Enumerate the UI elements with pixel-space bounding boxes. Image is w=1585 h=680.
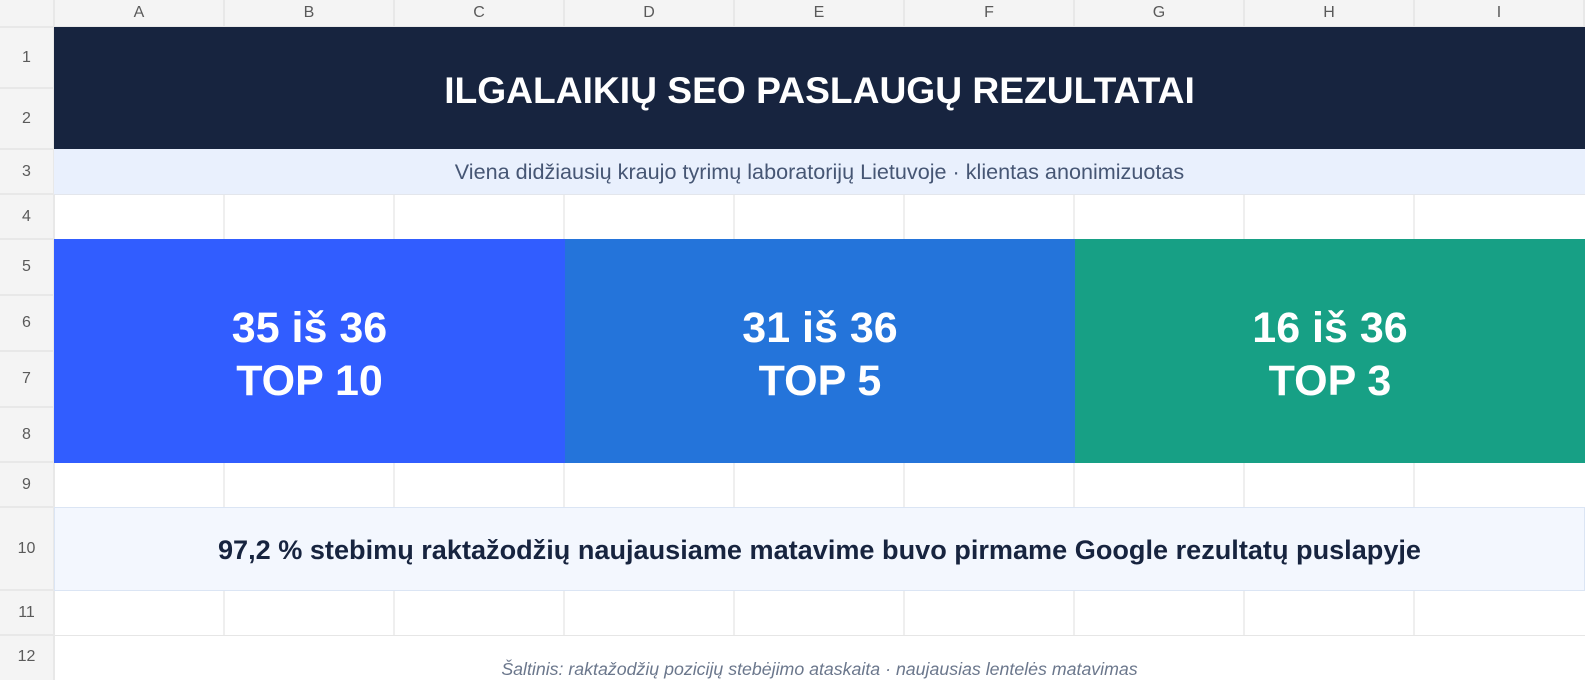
column headers: I xyxy=(1497,4,1501,21)
column headers: G xyxy=(1153,4,1165,21)
stat panel: TOP 5: 31 iš 36 xyxy=(742,304,898,352)
row headers: 10 xyxy=(18,540,35,556)
column headers: B xyxy=(304,4,314,21)
row headers: 2 xyxy=(22,110,31,126)
row headers: 9 xyxy=(22,476,31,492)
column headers xyxy=(0,0,1585,28)
column headers: H xyxy=(1323,4,1335,21)
subtitle: Viena didžiausių kraujo tyrimų laboratorijų Lietuvoje · klientas anonimizuotas xyxy=(455,159,1184,184)
key finding callout xyxy=(54,507,1585,591)
row headers xyxy=(0,28,55,680)
row headers: 1 xyxy=(22,48,31,66)
stat panel: TOP 3: 16 iš 36 xyxy=(1252,304,1408,352)
title banner xyxy=(54,27,1585,149)
subtitle xyxy=(54,149,1585,195)
row headers: 8 xyxy=(22,426,31,442)
stat panel: TOP 3: TOP 3 xyxy=(1269,357,1391,405)
column headers: A xyxy=(134,4,144,21)
stat panel: TOP 5: TOP 5 xyxy=(759,357,881,405)
stat panel: TOP 3 xyxy=(1075,239,1585,463)
column headers: D xyxy=(643,4,655,21)
row headers: 7 xyxy=(22,370,31,387)
stat panel: TOP 10 xyxy=(54,239,565,463)
column headers: C xyxy=(473,4,485,21)
source note: Šaltinis: raktažodžių pozicijų stebėjimo ataskaita · naujausias lentelės matavimas xyxy=(501,659,1138,679)
row headers: 4 xyxy=(22,208,31,224)
stat panel: TOP 10: TOP 10 xyxy=(236,357,383,405)
title banner: ILGALAIKIŲ SEO PASLAUGŲ REZULTATAI xyxy=(444,69,1195,111)
stat panel: TOP 10: 35 iš 36 xyxy=(232,304,387,352)
row headers: 12 xyxy=(18,648,35,664)
row headers: 3 xyxy=(22,162,31,180)
column headers: E xyxy=(814,4,824,21)
key finding callout: 97,2 % stebimų raktažodžių naujausiame matavime buvo pirmame Google rezultatų puslapyje xyxy=(218,534,1421,565)
row headers: 5 xyxy=(22,258,31,275)
stat panel: TOP 5 xyxy=(565,239,1075,463)
row headers: 6 xyxy=(22,314,31,331)
column headers: F xyxy=(984,4,994,21)
row headers: 11 xyxy=(18,604,35,620)
